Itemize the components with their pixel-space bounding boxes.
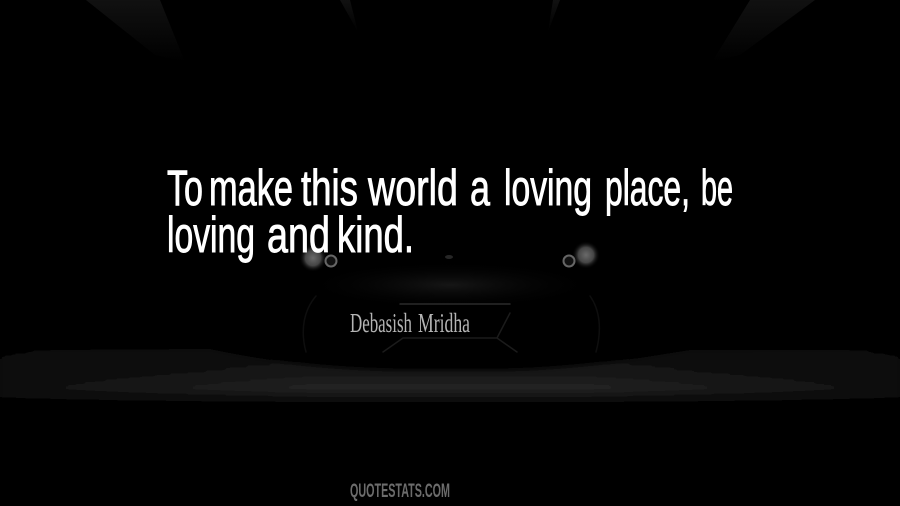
car silhouette — [299, 241, 600, 352]
author name: Mridha — [418, 308, 470, 338]
quote line 2: and — [267, 207, 330, 263]
car hood glow — [300, 261, 600, 309]
quote line 2: loving — [167, 207, 255, 263]
quote line 1: make — [209, 160, 293, 216]
ceiling light beams — [86, 0, 815, 62]
quote line 1: world — [367, 160, 458, 216]
quote line 1: be — [701, 160, 733, 216]
right headlight — [564, 241, 600, 269]
car grille lines — [303, 296, 599, 352]
quote text — [167, 160, 733, 263]
quote line 2: kind. — [337, 207, 414, 263]
quote line 1: loving — [504, 160, 592, 216]
quote line 1: To — [167, 160, 203, 216]
car badge — [445, 255, 453, 259]
left headlight — [299, 244, 336, 272]
ground — [0, 345, 900, 407]
source watermark: QUOTESTATS.COM — [350, 480, 450, 502]
author name: Debasish — [350, 308, 412, 338]
quote line 2 — [167, 207, 414, 263]
quote line 1: place, — [605, 160, 690, 216]
quote line 1: a — [470, 160, 490, 216]
quote line 1: this — [301, 160, 358, 216]
quote line 1 — [167, 160, 733, 216]
